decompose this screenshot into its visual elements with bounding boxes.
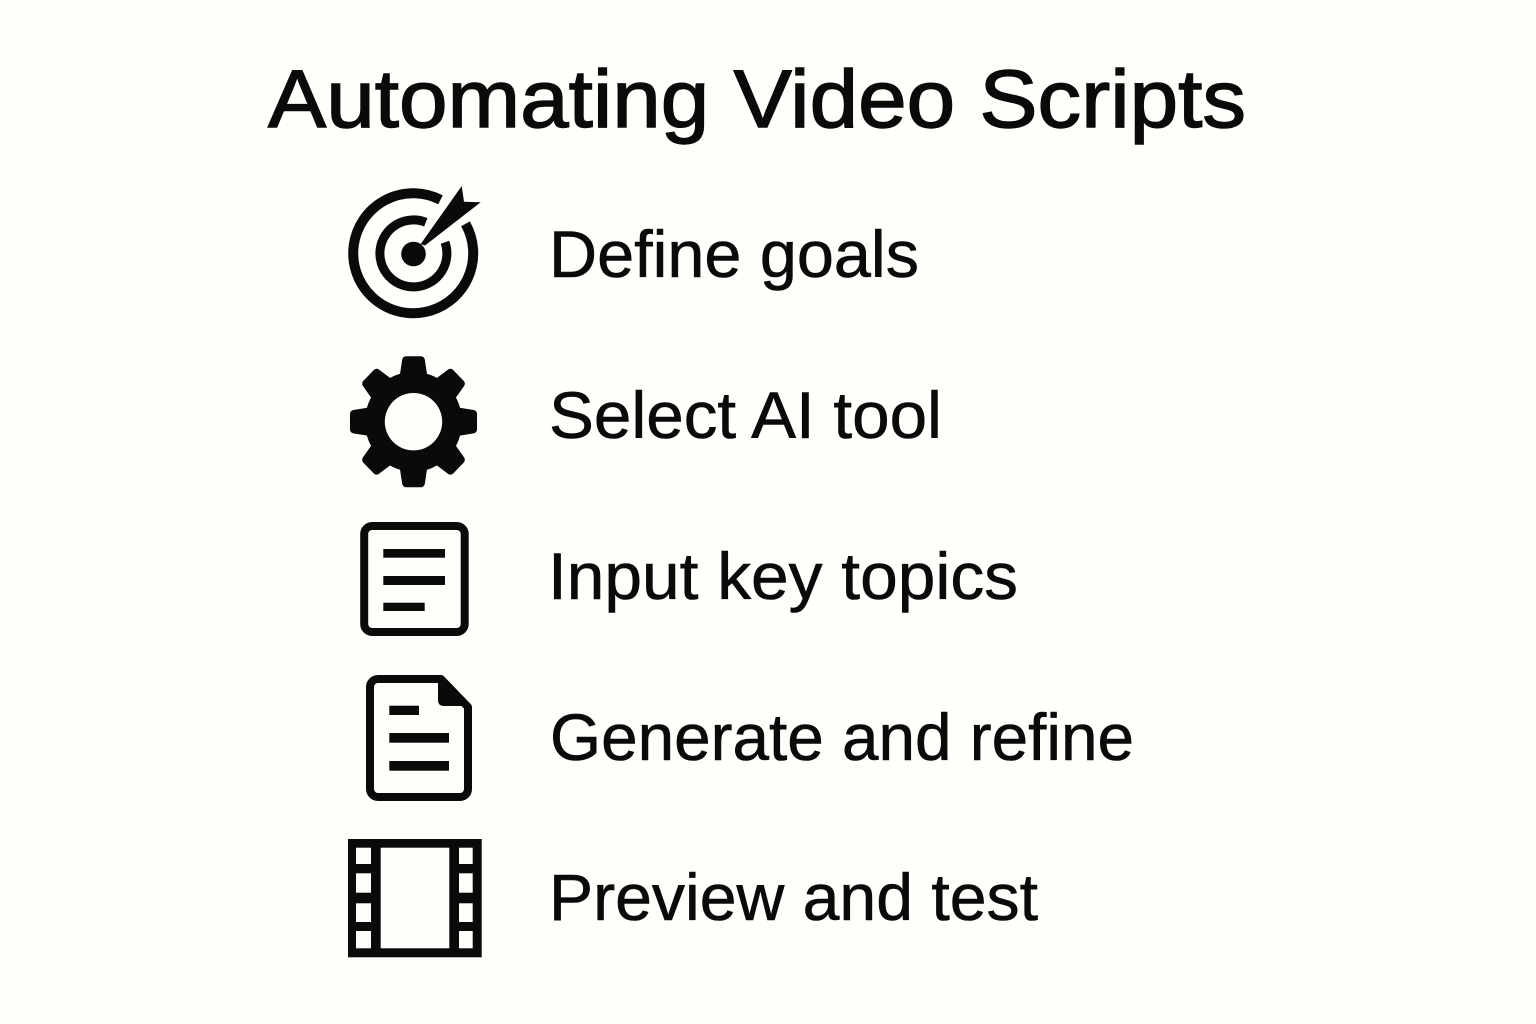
step 3: input key topics (364, 526, 1018, 632)
step 2: select AI tool (354, 360, 942, 483)
icon: film strip (348, 839, 482, 957)
label: generate and refine: Generate and refine (550, 700, 1134, 774)
step 1: define goals (353, 186, 919, 313)
title: Automating Video Scripts (268, 54, 1246, 145)
label: define goals: Define goals (549, 217, 919, 291)
icon: target with arrow (353, 186, 481, 313)
step 4: generate and refine (370, 679, 1134, 797)
label: preview and test: Preview and test (549, 860, 1038, 934)
label: select AI tool: Select AI tool (549, 378, 942, 452)
icon: text document (364, 526, 465, 632)
icon: file with folded corner (370, 679, 470, 797)
icon: gear (354, 360, 473, 483)
step 5: preview and test (348, 839, 1038, 957)
label: input key topics: Input key topics (548, 539, 1018, 613)
